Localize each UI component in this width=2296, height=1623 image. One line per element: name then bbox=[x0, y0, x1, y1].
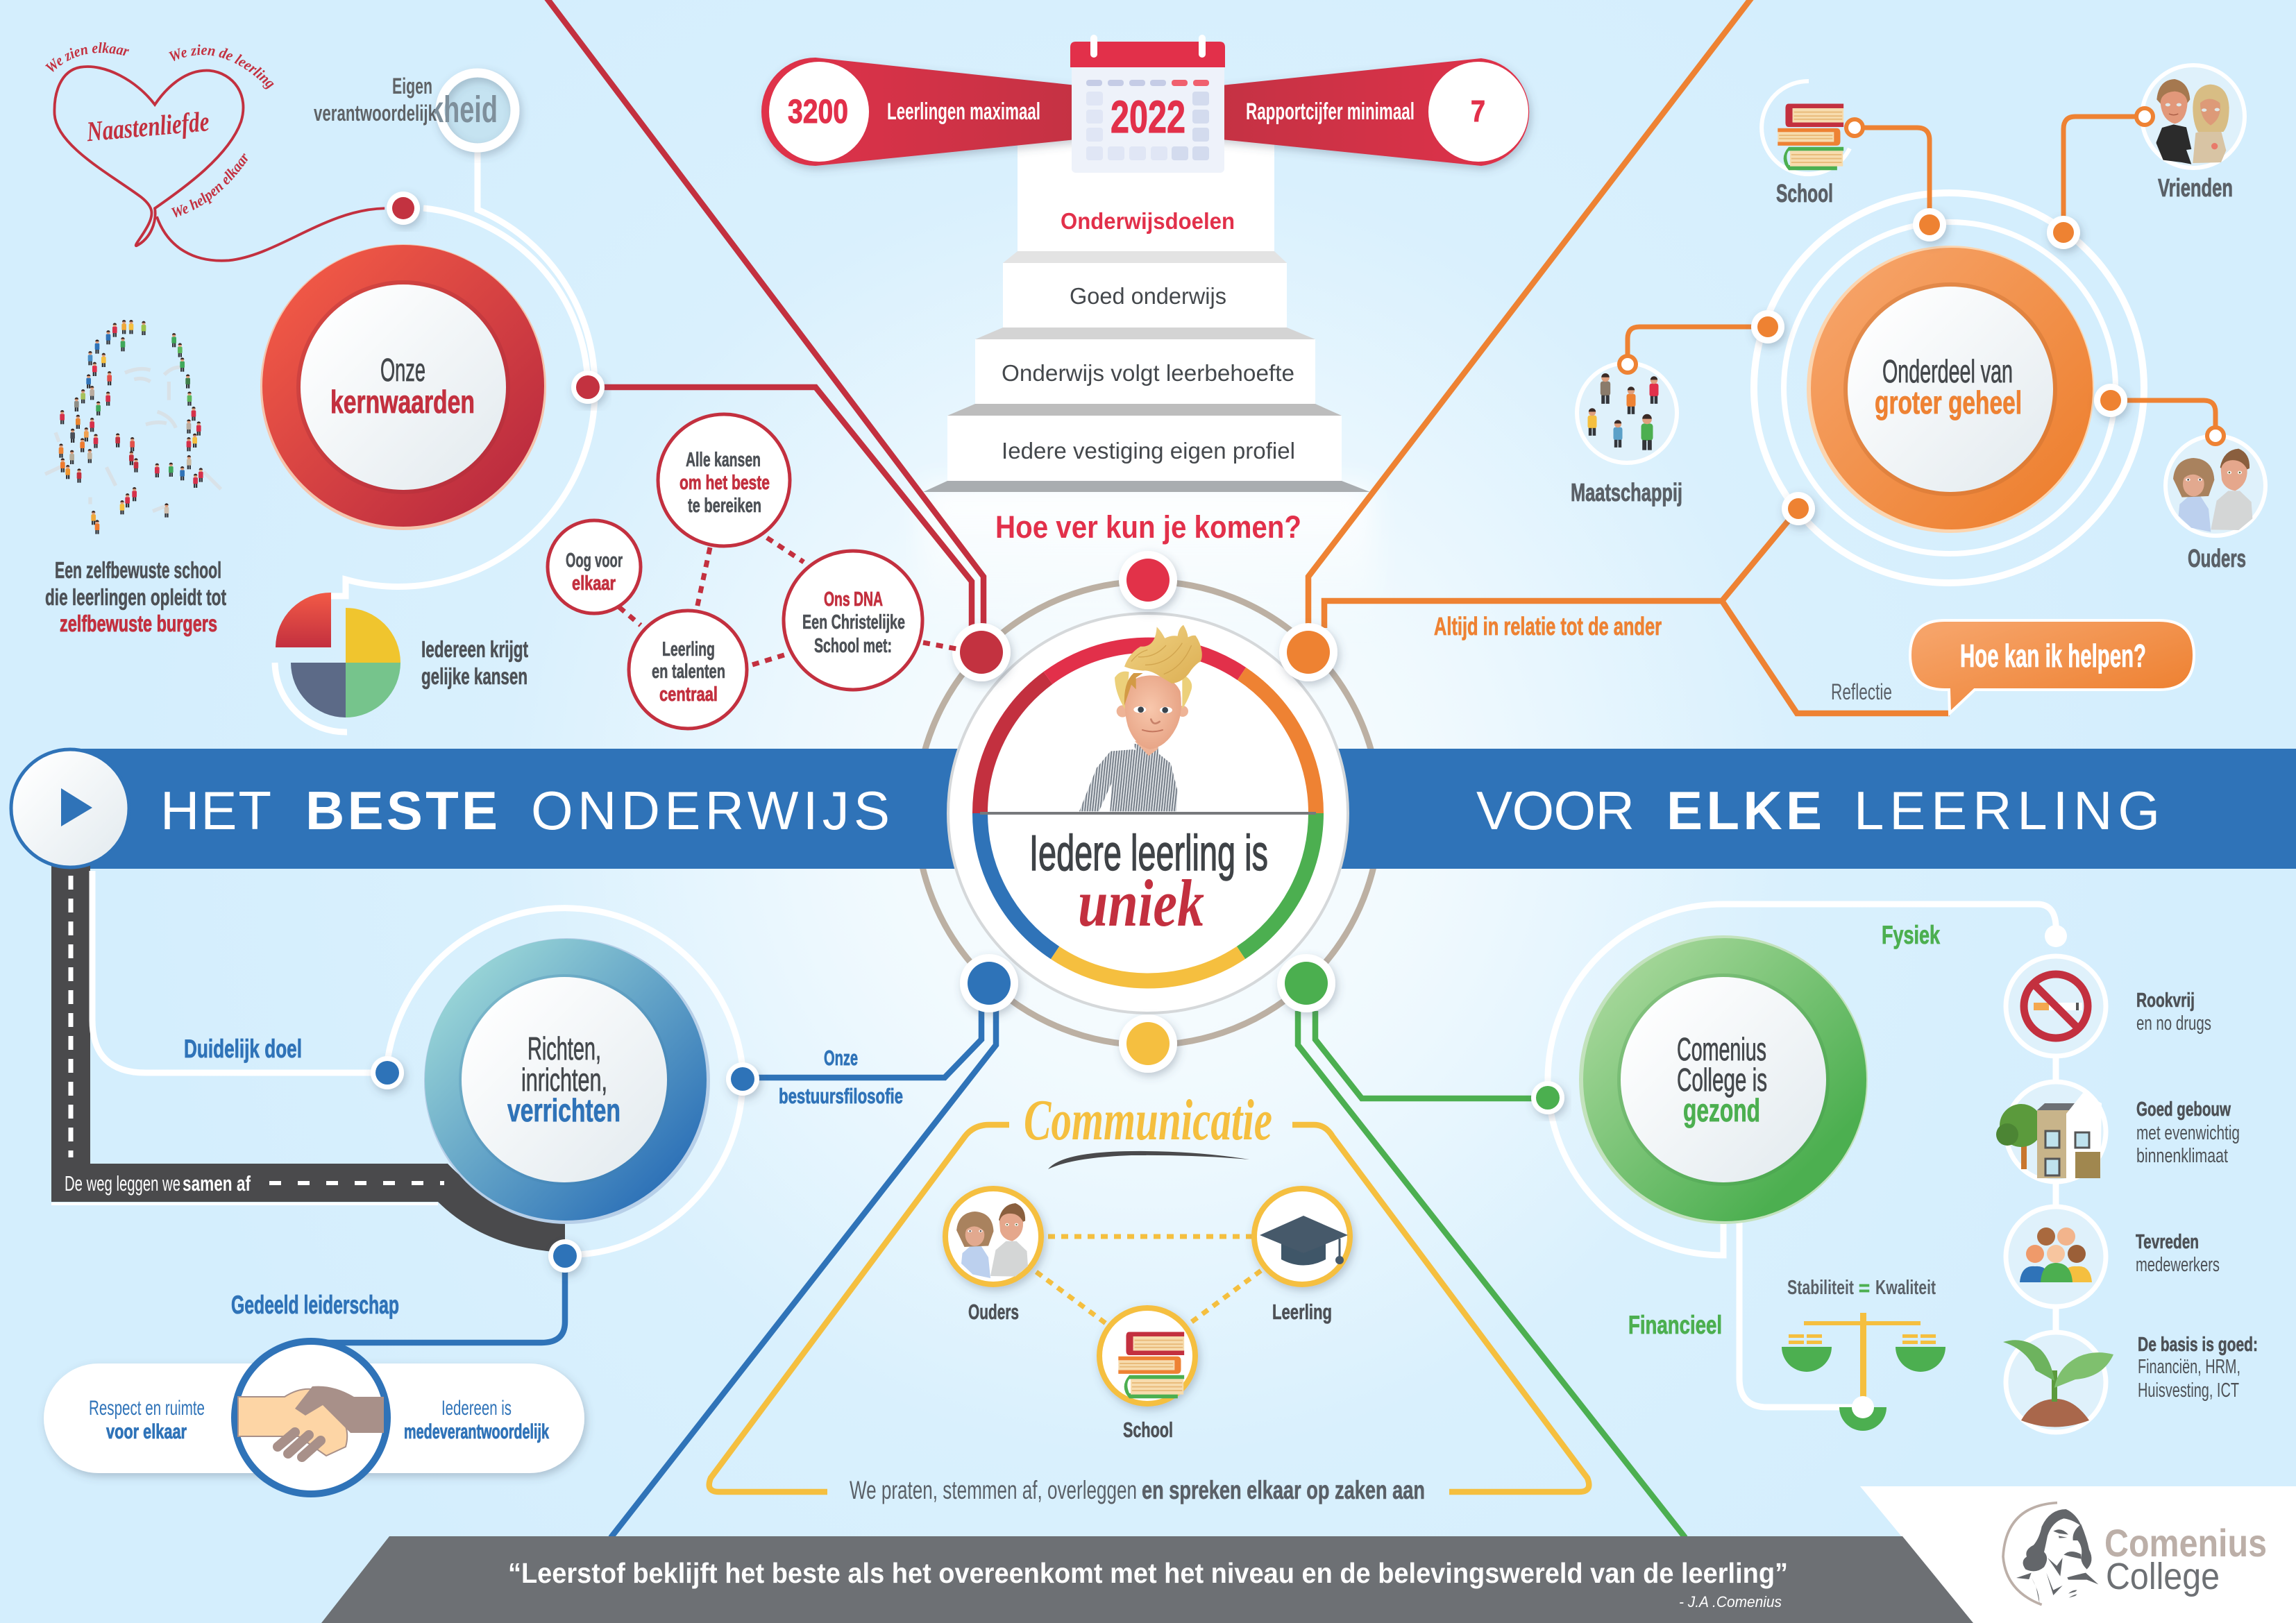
blue title bar left: HET bbox=[160, 780, 271, 841]
icon: balance scale stabiliteit = kwaliteit: Stabiliteit bbox=[1787, 1277, 1854, 1299]
circle: comenius college is gezond: College is bbox=[1677, 1062, 1767, 1098]
dotted connections between DNA bubbles bbox=[619, 538, 956, 665]
circle: eigen verantwoordelijkheid: Eigen bbox=[392, 74, 432, 99]
step: iedere vestiging eigen profiel: Iedere vestiging eigen profiel bbox=[1002, 438, 1295, 464]
text: iedereen krijgt gelijke kansen: gelijke kansen bbox=[421, 663, 527, 689]
bubble: ons DNA bbox=[784, 551, 922, 690]
panel: naastenliefde heart: We zien de leerling bbox=[169, 44, 274, 89]
bubble: leerling en talenten centraal: Leerling bbox=[662, 638, 715, 661]
red banner right: rapportcijfer 7 bbox=[1215, 58, 1529, 166]
label: onze bestuursfilosofie: Onze bbox=[824, 1046, 858, 1070]
step: onderwijs volgt leerbehoefte: Onderwijs volgt leerbehoefte bbox=[1002, 360, 1294, 386]
circle: richten inrichten verrichten: verrichten bbox=[507, 1092, 621, 1128]
label: onze bestuursfilosofie bbox=[779, 1046, 903, 1108]
swoosh bbox=[1048, 1151, 1249, 1169]
tan ring around centre bbox=[916, 581, 1380, 1045]
pill: respect en verantwoordelijkheid: Iedereen is bbox=[441, 1397, 512, 1420]
pill: respect en verantwoordelijkheid: voor elkaar bbox=[106, 1420, 187, 1443]
icon: tevreden medewerkers: medewerkers bbox=[2136, 1254, 2220, 1276]
circle: eigen verantwoordelijkheid: verantwoordelijk bbox=[314, 101, 437, 126]
blue title bar right: LEERLING bbox=[1854, 780, 2160, 841]
blue connector lines bbox=[611, 1008, 996, 1538]
bubble: leerling en talenten centraal: centraal bbox=[659, 683, 718, 706]
text: zelfbewuste school: Een zelfbewuste school bbox=[55, 557, 221, 583]
white logo corner bbox=[1860, 1486, 2296, 1623]
speech bubble: hoe kan ik helpen: Hoe kan ik helpen? bbox=[1960, 638, 2146, 674]
arcs around kernwaarden bbox=[275, 151, 595, 732]
circle: onze kernwaarden: kernwaarden bbox=[330, 384, 475, 420]
panel: stairs onderwijsdoelen bbox=[923, 139, 1370, 545]
bubble: leerling en talenten centraal bbox=[629, 611, 747, 729]
panel: communicatie triangle bbox=[709, 1088, 1589, 1504]
illustration: crowd of tiny people portrait bbox=[45, 320, 221, 534]
icon: tevreden medewerkers: Tevreden bbox=[2136, 1231, 2199, 1253]
circle: richten inrichten verrichten: Richten, bbox=[527, 1030, 601, 1067]
icon: rookvrij: en no drugs bbox=[2136, 1012, 2211, 1035]
node: leerling: Leerling bbox=[1272, 1300, 1332, 1324]
red banner right: rapportcijfer 7: 7 bbox=[1471, 94, 1485, 128]
circle: onze kernwaarden bbox=[260, 244, 546, 530]
icon: maatschappij bbox=[1571, 356, 1682, 507]
bubble: leerling en talenten centraal: en talenten bbox=[652, 661, 725, 683]
caption: We praten, stemmen af, overleggen bbox=[850, 1476, 1137, 1504]
text: iedereen krijgt gelijke kansen: Iedereen krijgt bbox=[421, 636, 528, 662]
pill: respect en verantwoordelijkheid bbox=[44, 1363, 584, 1473]
progress ring segments bbox=[980, 645, 1316, 980]
road: de weg leggen we samen af: De weg leggen we bbox=[65, 1171, 180, 1196]
caption: en spreken elkaar op zaken aan bbox=[1142, 1476, 1425, 1504]
blue leiderschap connector bbox=[312, 1256, 565, 1343]
pill: respect en verantwoordelijkheid: Respect en ruimte bbox=[89, 1397, 205, 1420]
icon: vrienden bbox=[2136, 65, 2245, 202]
panel: naastenliefde heart: We zien elkaar bbox=[45, 42, 129, 72]
bubble: alle kansen bbox=[658, 414, 790, 546]
panel: naastenliefde heart: We helpen elkaar bbox=[171, 153, 248, 218]
label: reflectie: Reflectie bbox=[1831, 679, 1892, 704]
bubble: alle kansen: Alle kansen bbox=[686, 449, 761, 471]
icon: balance scale stabiliteit = kwaliteit bbox=[1782, 1277, 1945, 1431]
heading: hoe ver kun je komen: Hoe ver kun je komen? bbox=[995, 509, 1301, 545]
node: school: School bbox=[1123, 1418, 1173, 1442]
bubble: oog voor elkaar bbox=[548, 520, 641, 613]
orange ring dots bbox=[1751, 208, 2127, 525]
white fade under stairs bbox=[915, 486, 1381, 624]
icon: balance scale stabiliteit = kwaliteit: Kwaliteit bbox=[1875, 1277, 1936, 1299]
orange connector lines bbox=[1308, 0, 1950, 713]
node dots on central ring bbox=[952, 551, 1337, 1073]
circle: onderdeel van groter geheel bbox=[1807, 246, 2094, 533]
label: duidelijk doel: Duidelijk doel bbox=[184, 1035, 302, 1063]
quote bar: “Leerstof beklijft het beste als het overeenkomt met het niveau en de belevingswereld van de leerling” bbox=[508, 1557, 1788, 1589]
text: zelfbewuste school: zelfbewuste burgers bbox=[60, 611, 217, 636]
bubble: oog voor elkaar: Oog voor bbox=[566, 550, 623, 572]
icon: goed gebouw: binnenklimaat bbox=[2136, 1145, 2228, 1167]
icon: maatschappij: Maatschappij bbox=[1571, 478, 1682, 507]
blue title bar left: BESTE bbox=[305, 780, 498, 841]
pill: respect en verantwoordelijkheid: medeverantwoordelijk bbox=[404, 1420, 549, 1443]
chart: pie gelijke kansen bbox=[276, 593, 400, 717]
logo: comenius college: Comenius bbox=[2104, 1521, 2267, 1565]
icon: goed gebouw: met evenwichtig bbox=[2136, 1122, 2240, 1144]
red banner left: 3200 leerlingen: 3200 bbox=[788, 94, 848, 130]
blue title bar right: VOOR bbox=[1476, 780, 1635, 841]
icon: tevreden medewerkers bbox=[2006, 1207, 2220, 1307]
icon: ouders bbox=[2166, 427, 2265, 572]
text: zelfbewuste school bbox=[45, 557, 226, 636]
label: financieel: Financieel bbox=[1628, 1311, 1722, 1339]
label: fysiek: Fysiek bbox=[1882, 921, 1940, 949]
icon: ouders: Ouders bbox=[2188, 544, 2246, 572]
text: iedereen krijgt gelijke kansen bbox=[421, 636, 528, 689]
label: onze bestuursfilosofie: bestuursfilosofie bbox=[779, 1084, 903, 1108]
red banner left: 3200 leerlingen bbox=[761, 58, 1083, 166]
node: school bbox=[1099, 1308, 1195, 1442]
circle: richten inrichten verrichten: inrichten, bbox=[521, 1062, 607, 1098]
bubble: oog voor elkaar: elkaar bbox=[572, 572, 616, 595]
speech bubble: hoe kan ik helpen bbox=[1910, 620, 2194, 713]
icon: school books: School bbox=[1776, 179, 1833, 207]
dot: kernwaarden connector bbox=[571, 371, 605, 404]
icon: goed gebouw: Goed gebouw bbox=[2136, 1098, 2231, 1121]
node: ouders: Ouders bbox=[968, 1300, 1019, 1324]
blue title bar left: ONDERWIJS bbox=[531, 780, 890, 841]
road: de weg leggen we samen af: samen af bbox=[183, 1171, 251, 1196]
circle: eigen verantwoordelijkheid bbox=[314, 73, 515, 148]
circle: comenius college is gezond: gezond bbox=[1683, 1092, 1760, 1128]
heading: onderwijsdoelen: Onderwijsdoelen bbox=[1061, 208, 1235, 234]
red banner right: rapportcijfer 7: Rapportcijfer minimaal bbox=[1246, 99, 1415, 125]
circle: onderdeel van groter geheel: groter geheel bbox=[1875, 384, 2022, 420]
icon: plant de basis is goed bbox=[2003, 1332, 2258, 1432]
quote bar bbox=[321, 1536, 1973, 1623]
bubble: ons DNA: Ons DNA bbox=[824, 588, 883, 611]
icon: rookvrij bbox=[2006, 956, 2211, 1056]
heading: communicatie: Communicatie bbox=[1024, 1088, 1272, 1153]
road: de weg leggen we samen af bbox=[51, 864, 565, 1252]
label: gedeeld leiderschap: Gedeeld leiderschap bbox=[231, 1291, 399, 1319]
icon: plant de basis is goed: Financiën, HRM, bbox=[2138, 1356, 2240, 1378]
central disc: iedere leerling is uniek: uniek bbox=[1078, 866, 1204, 940]
icon: plant de basis is goed: Huisvesting, ICT bbox=[2138, 1379, 2239, 1402]
icon: vrienden: Vrienden bbox=[2158, 173, 2233, 202]
circle: onze kernwaarden: Onze bbox=[380, 352, 425, 388]
green connector lines bbox=[1298, 1011, 1685, 1538]
circle: eigen verantwoordelijkheid: kheid bbox=[429, 89, 498, 130]
circle: comenius college is gezond bbox=[1579, 935, 1868, 1224]
dotted links bbox=[1036, 1237, 1261, 1323]
circle: richten inrichten verrichten bbox=[424, 938, 710, 1224]
step: goed onderwijs: Goed onderwijs bbox=[1070, 283, 1226, 309]
node: ouders bbox=[945, 1189, 1041, 1324]
logo: comenius college: College bbox=[2106, 1556, 2220, 1597]
blue title bar right: ELKE bbox=[1666, 780, 1822, 841]
blue title bar right bbox=[1312, 749, 2296, 869]
divider bbox=[980, 812, 1316, 815]
logo: comenius college bbox=[2003, 1503, 2267, 1605]
icon: rookvrij: Rookvrij bbox=[2136, 989, 2195, 1012]
dot: green connector bbox=[1531, 1081, 1564, 1114]
bubble: alle kansen: om het beste bbox=[679, 472, 770, 494]
central disc: iedere leerling is uniek: Iedere leerling is bbox=[1029, 826, 1268, 881]
circle: comenius college is gezond: Comenius bbox=[1677, 1031, 1766, 1067]
orange icon connectors bbox=[1628, 117, 2215, 436]
panel: naastenliefde heart: Naastenliefde bbox=[85, 105, 210, 147]
dot: fysiek connector bbox=[2045, 925, 2067, 947]
icon: school books bbox=[1762, 81, 1863, 207]
rings around orange circle bbox=[1754, 193, 2144, 583]
central disc: iedere leerling is uniek bbox=[948, 613, 1348, 1013]
icon: calendar 2022: 2022 bbox=[1111, 91, 1185, 142]
bubble: alle kansen: te bereiken bbox=[688, 495, 761, 517]
bubble: ons DNA: School met: bbox=[814, 635, 892, 657]
icon: calendar 2022 bbox=[1070, 35, 1225, 173]
label: altijd in relatie: Altijd in relatie tot de ander bbox=[1434, 612, 1662, 640]
icon: handshake bbox=[235, 1341, 387, 1494]
red banner left: 3200 leerlingen: Leerlingen maximaal bbox=[887, 99, 1040, 125]
red connector lines bbox=[546, 0, 984, 628]
text: zelfbewuste school: die leerlingen opleidt tot bbox=[45, 584, 226, 610]
dot: heart connector bbox=[387, 192, 420, 225]
blue title bar left bbox=[70, 749, 986, 869]
panel: naastenliefde heart bbox=[45, 42, 385, 262]
icon: goed gebouw bbox=[1996, 1082, 2240, 1182]
quote bar: - J.A .Comenius bbox=[1679, 1593, 1782, 1611]
white lines around blue circle bbox=[92, 871, 743, 1255]
icon: play button bbox=[11, 749, 129, 867]
blue ring dots bbox=[371, 1056, 759, 1273]
node: leerling bbox=[1254, 1189, 1350, 1324]
bubble: ons DNA: Een Christelijke bbox=[802, 611, 905, 634]
icon: balance scale stabiliteit = kwaliteit: = bbox=[1859, 1277, 1870, 1300]
circle: onderdeel van groter geheel: Onderdeel van bbox=[1882, 353, 2013, 389]
boy character bbox=[1079, 625, 1202, 811]
white lines around green circle bbox=[1548, 904, 2056, 1407]
